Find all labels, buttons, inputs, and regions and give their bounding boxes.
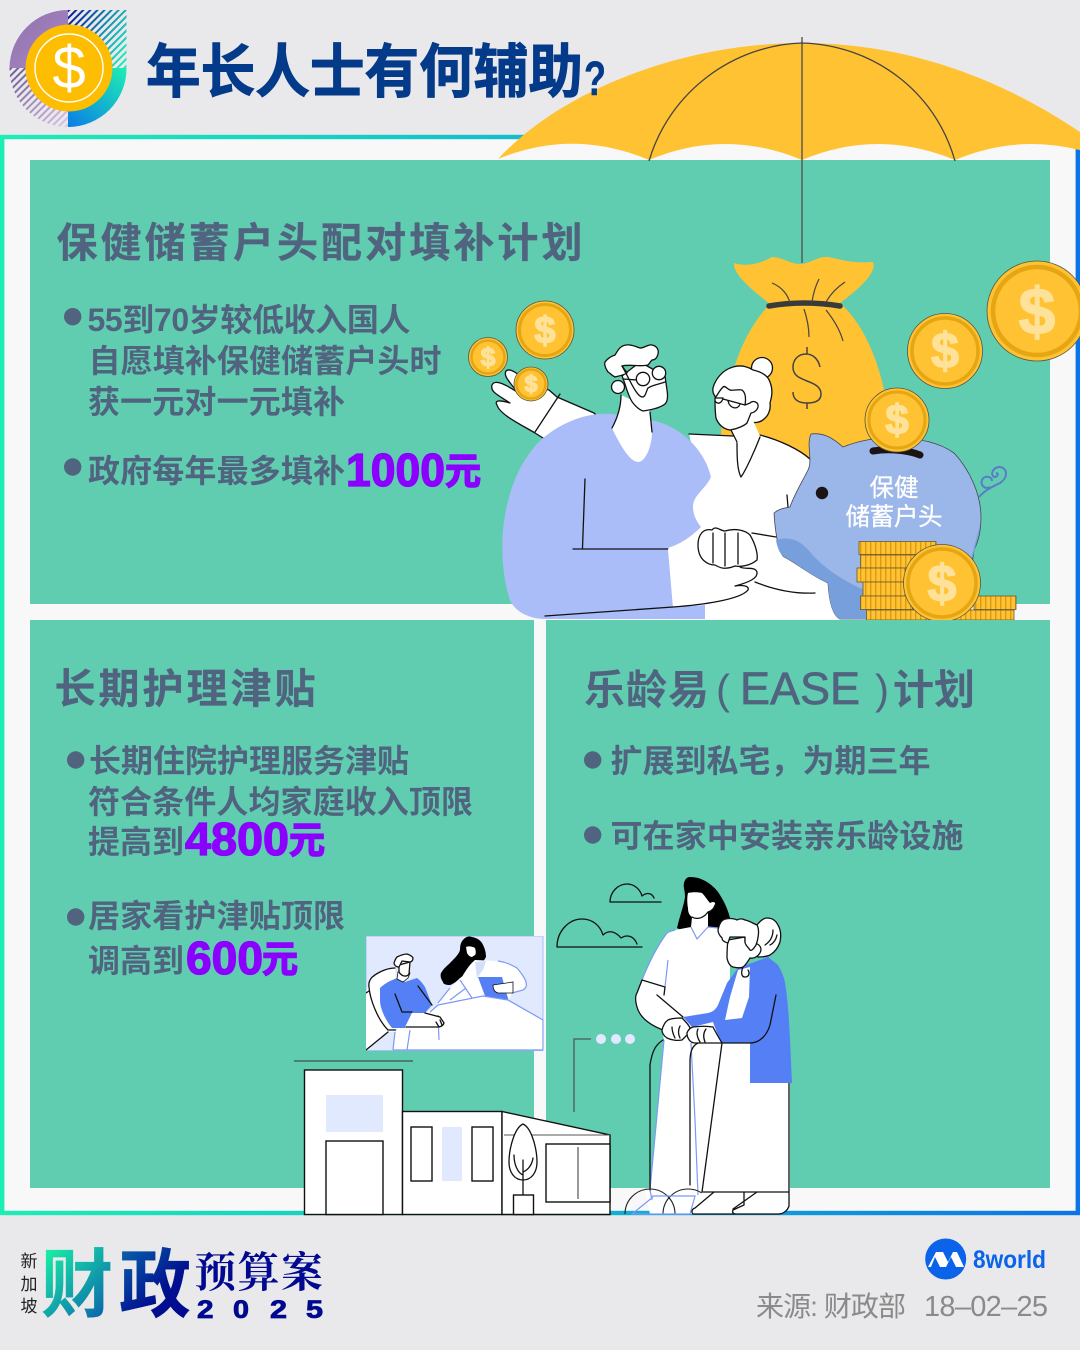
illustration: building xyxy=(294,1061,610,1214)
icon: small coin left: $ xyxy=(481,342,496,372)
bullet two: 居家看护津贴顶限 xyxy=(88,898,345,934)
brand lockup: Singapore Budget 2025 xyxy=(20,1243,323,1327)
wordmark: fiscal: 财 xyxy=(41,1243,113,1327)
logo: coin emblem: $ xyxy=(52,34,86,101)
elderly skirt xyxy=(692,1040,790,1214)
neck xyxy=(730,418,760,443)
bullet two: 1000 xyxy=(346,444,445,496)
bullet one: 符合条件人均家庭收入顶限 xyxy=(88,784,473,820)
wordmark: budget: 预算案 xyxy=(194,1250,323,1297)
panel text: savings top matching xyxy=(56,220,582,496)
hair xyxy=(605,345,658,377)
icon: coin top left: $ xyxy=(534,310,556,352)
logo: 8world xyxy=(925,1238,1046,1280)
wordmark: politics: 政 xyxy=(119,1243,191,1327)
elderly blouse xyxy=(725,967,750,1020)
icon: coin on stack xyxy=(904,544,980,622)
doctor face xyxy=(466,946,476,957)
heading: ( xyxy=(716,666,730,713)
illustration: carer and elderly woman xyxy=(625,877,792,1214)
carer hair xyxy=(677,877,733,935)
bullet one xyxy=(64,302,441,420)
heading: 计划 xyxy=(893,667,975,713)
elderly face xyxy=(727,937,761,968)
panel: EASE xyxy=(546,620,1050,1188)
face xyxy=(622,362,668,411)
doctor hand xyxy=(493,982,513,993)
bullet one: 提高到 xyxy=(88,824,184,860)
heading: 乐龄易 xyxy=(584,667,709,713)
torso xyxy=(502,414,711,619)
illustration: piggy bank xyxy=(774,434,1006,619)
icon: small coin in hand: $ xyxy=(525,371,538,397)
necklace xyxy=(742,967,749,977)
bullet two xyxy=(64,444,481,496)
heading: 长期护理津贴 xyxy=(54,666,316,712)
bullet one: 获一元对一元填补 xyxy=(88,384,345,420)
shoes xyxy=(625,1189,713,1214)
panel text: EASE xyxy=(584,663,975,854)
heading: EASE xyxy=(740,663,860,714)
content frame xyxy=(2,137,1078,1213)
chair xyxy=(366,968,400,1050)
source line: 来源: 财政部 xyxy=(756,1291,906,1322)
label: Singapore xyxy=(20,1252,38,1316)
elderly cardigan xyxy=(683,957,792,1083)
brow and nose line xyxy=(622,366,665,397)
illustration: elderly man xyxy=(492,345,757,619)
bed sheet xyxy=(393,996,543,1050)
title: 年长人士有何辅助 xyxy=(146,40,583,105)
label: Singapore: 新 xyxy=(20,1252,38,1271)
illustration: speech dots xyxy=(574,1034,635,1112)
raised arm xyxy=(492,370,620,440)
glasses xyxy=(623,379,637,380)
patient arm and hand xyxy=(405,1013,439,1027)
panel text: long-term care xyxy=(54,666,473,984)
date: 18–02–25 xyxy=(924,1291,1048,1323)
wordmark: year: 2 xyxy=(197,1296,214,1324)
wordmark: year: 2 xyxy=(270,1296,287,1324)
pig label line two: 储蓄户头 xyxy=(846,503,942,531)
panel: long-term care xyxy=(30,620,534,1188)
carer body and legs xyxy=(636,927,730,1214)
pig label: 保健 xyxy=(870,474,918,502)
patient neck xyxy=(397,972,410,982)
heading: 保健储蓄户头配对填补计划 xyxy=(56,220,582,266)
elderly bun hair xyxy=(745,918,781,957)
title: ? xyxy=(584,53,606,106)
doctor hair xyxy=(441,936,486,985)
clipboard xyxy=(478,977,508,1000)
patient hair xyxy=(394,954,413,967)
wordmark: year: 5 xyxy=(306,1296,323,1324)
ear xyxy=(612,380,624,394)
hair xyxy=(713,366,772,423)
elderly fringe xyxy=(718,918,759,950)
wordmark: year xyxy=(197,1296,323,1324)
icon: coin on stack: $ xyxy=(928,555,957,613)
panel: savings top matching xyxy=(30,160,1050,604)
icon: small coin in hand xyxy=(514,367,548,401)
bullet two: 调高到 xyxy=(88,943,184,979)
bullet one: 扩展到私宅，为期三年 xyxy=(610,743,930,779)
clasped hands on cane xyxy=(662,1018,690,1040)
bullet two xyxy=(67,898,345,984)
carer neck and face xyxy=(687,892,715,939)
clasped hands xyxy=(668,549,757,607)
bullet two: 政府每年最多填补 xyxy=(88,453,345,489)
logo: 8world: 8world xyxy=(973,1246,1046,1274)
icon: coin top left xyxy=(516,301,574,359)
illustration: nurse and patient xyxy=(366,936,543,1050)
bullet one: 4800 xyxy=(185,813,289,865)
illustration: coin stacks xyxy=(857,542,1016,620)
icon: umbrella xyxy=(498,37,1080,263)
bullet one: 55到70岁较低收入国人 xyxy=(88,302,410,338)
patient face xyxy=(399,962,410,976)
heading: ) xyxy=(875,666,889,713)
icon: coin right mid: $ xyxy=(931,323,959,379)
icon: tree xyxy=(509,1124,537,1214)
wordmark: year: 0 xyxy=(233,1296,249,1324)
patient torso xyxy=(380,978,432,1028)
bullet two: 元 xyxy=(262,939,298,980)
label: Singapore: 坡 xyxy=(20,1297,38,1316)
icon: small coin left xyxy=(468,338,508,376)
glasses xyxy=(715,398,745,408)
bullet two: 600 xyxy=(186,932,263,984)
logo: coin emblem xyxy=(9,10,127,127)
bun xyxy=(752,358,772,378)
bullet one: 元 xyxy=(289,820,325,861)
neck and collar xyxy=(612,395,652,462)
bullet one: 自愿填补保健储蓄户头时 xyxy=(88,343,442,379)
bullet one: 长期住院护理服务津贴 xyxy=(89,743,409,779)
illustration: clouds xyxy=(557,884,661,947)
bullet two: 元 xyxy=(445,451,481,492)
icon: coin right large xyxy=(987,261,1080,361)
face xyxy=(715,386,758,430)
icon: money bag xyxy=(719,257,886,460)
icon: coin right large: $ xyxy=(1019,274,1055,348)
illustration: elderly woman xyxy=(660,358,835,619)
doctor coat xyxy=(438,960,526,1008)
icon: coin into slot: $ xyxy=(885,396,909,443)
bullet two: 可在家中安装亲乐龄设施 xyxy=(610,818,964,854)
icon: coin into slot xyxy=(865,388,929,452)
bullet one xyxy=(67,743,473,865)
icon: coin right mid xyxy=(908,314,982,388)
label: Singapore: 加 xyxy=(20,1275,38,1294)
